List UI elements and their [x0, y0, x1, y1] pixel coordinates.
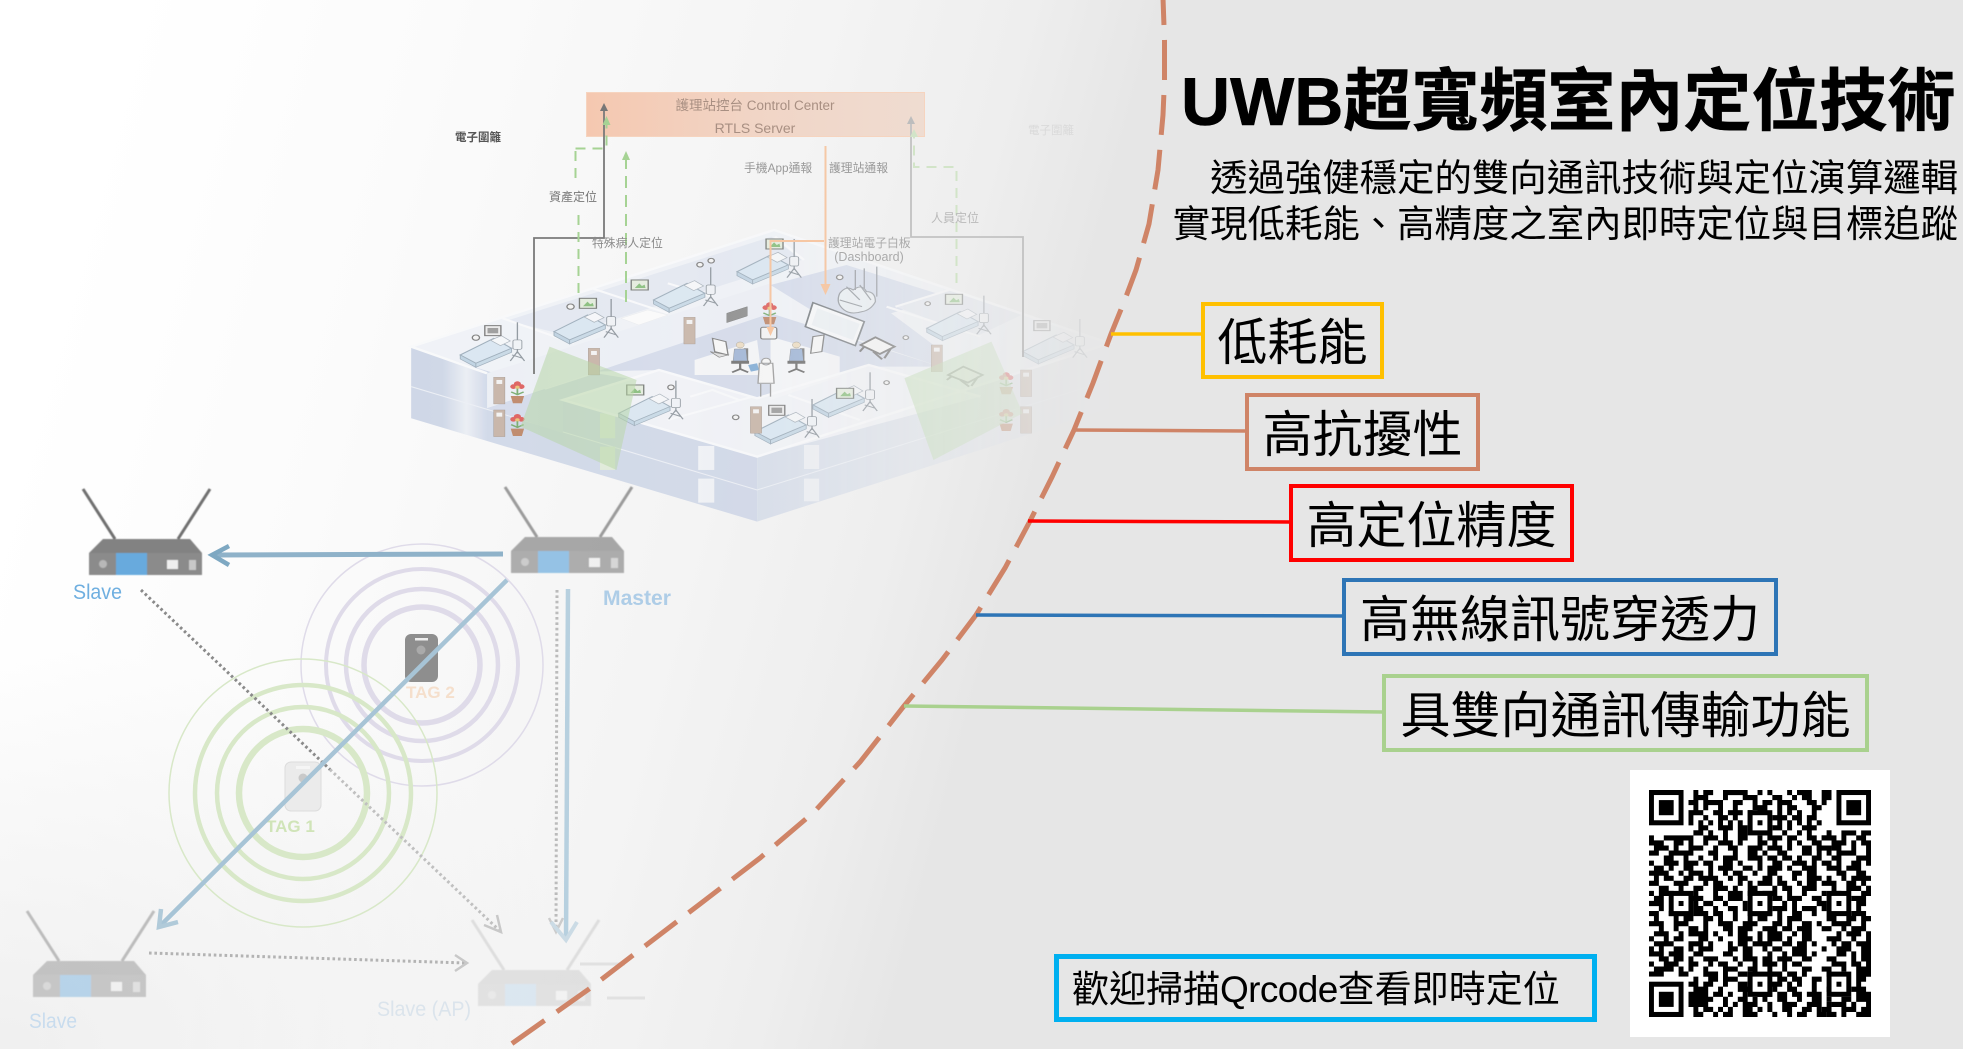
feature: low power: [1201, 302, 1384, 379]
illustration layer: building, routers, tags, curve: [26, 0, 1382, 1046]
arrow: master to lower slave: [159, 580, 507, 927]
diagram labels: 護理站電子白板: [828, 236, 911, 250]
tag 1 signal rings: [169, 659, 437, 927]
icon: tag 1 device: [266, 762, 321, 836]
label: slave: Slave: [73, 581, 122, 604]
system data lines and arrows: [534, 103, 1023, 374]
control center box: RTLS Server: [715, 120, 796, 136]
dotted links between anchors: [141, 590, 645, 998]
title: UWB超寬頻室內定位技術: [1181, 64, 1955, 140]
diagram labels: 電子圍籬: [455, 130, 501, 144]
feature: positioning accuracy: [1289, 484, 1574, 562]
diagram labels: 手機App通報: [744, 161, 812, 175]
icon: tag 2 device: [405, 634, 455, 702]
connector: low power: [1111, 332, 1201, 336]
dashed arc divider: [500, 0, 1164, 1049]
green positioning zones: [521, 342, 1023, 470]
nurse station: desks, whiteboard, staff: [710, 303, 983, 397]
connector: signal penetration: [976, 615, 1343, 616]
diagram labels: 護理站通報: [829, 161, 888, 175]
label: access point slave: Slave (AP): [377, 998, 471, 1021]
control center box: 護理站控台 Control Center: [675, 98, 835, 113]
diagram labels: [455, 123, 1074, 264]
beds and room equipment: [460, 239, 1087, 444]
diagram labels: 特殊病人定位: [592, 236, 663, 250]
building floor plan: [411, 230, 1110, 522]
subtitle: [1173, 157, 1958, 245]
icon: tag 1 device: TAG 1: [266, 817, 315, 836]
feature: signal penetration: [1342, 578, 1778, 656]
diagram labels: 電子圍籬: [1028, 123, 1074, 137]
icon: lower slave router: [27, 911, 154, 997]
diagram labels: (Dashboard): [834, 250, 904, 264]
feature: positioning accuracy: 高定位精度: [1306, 498, 1556, 554]
callout: scan QR code: [1054, 954, 1597, 1022]
building upper floor: [411, 236, 934, 458]
diagram labels: 人員定位: [931, 210, 979, 225]
feature: two-way communication: 具雙向通訊傳輸功能: [1400, 688, 1850, 744]
icon: access point router: [472, 920, 599, 1006]
icon: tag 2 device: TAG 2: [406, 683, 455, 702]
label: master: Master: [603, 587, 671, 610]
connector: two-way communication: [904, 706, 1383, 712]
tag 2 signal rings: [301, 544, 543, 786]
arrow: master to slave: [212, 546, 503, 565]
control center box: [586, 92, 924, 136]
feature: interference resistance: 高抗擾性: [1262, 406, 1462, 462]
icon: slave router: [83, 489, 210, 575]
diagram labels: 資產定位: [549, 189, 597, 204]
feature: low power: 低耗能: [1218, 315, 1368, 371]
feature: two-way communication: [1382, 674, 1869, 752]
connector: interference resistance: [1073, 430, 1246, 431]
building walls: [411, 348, 932, 522]
QR code: [1630, 770, 1890, 1037]
icon: master router: [505, 487, 632, 573]
feature: signal penetration: 高無線訊號穿透力: [1360, 592, 1760, 648]
feature: interference resistance: [1245, 393, 1480, 471]
subtitle: 實現低耗能、高精度之室內即時定位與目標追蹤: [1173, 203, 1958, 245]
connector: positioning accuracy: [1028, 521, 1290, 522]
arrow: master to access point: [551, 589, 577, 940]
subtitle: 透過強健穩定的雙向通訊技術與定位演算邏輯: [1210, 157, 1958, 199]
callout: scan QR code: 歡迎掃描Qrcode查看即時定位: [1072, 969, 1560, 1010]
label: lower slave: Slave: [29, 1010, 77, 1033]
